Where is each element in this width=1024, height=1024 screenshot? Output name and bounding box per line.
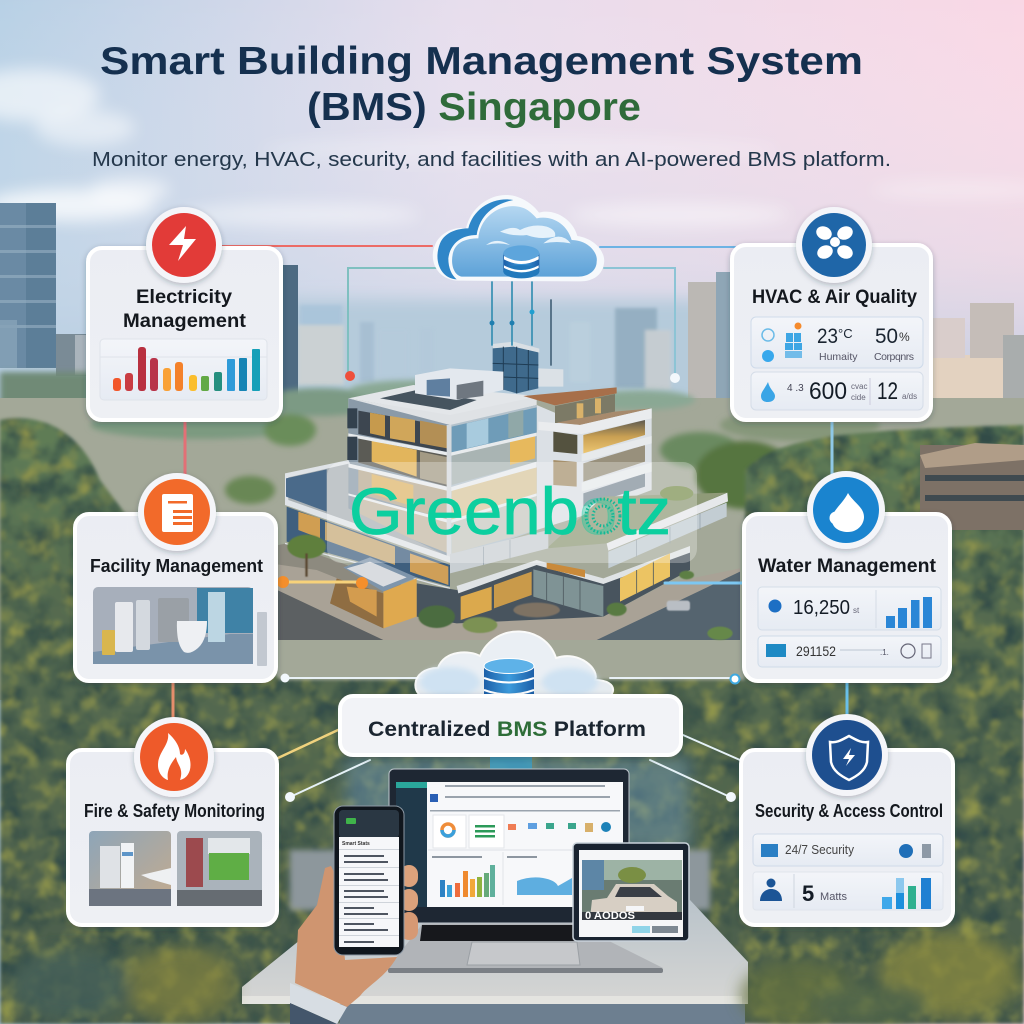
panel: electricity management [88,207,281,420]
desk floor [242,900,748,1004]
subtitle: Monitor energy, HVAC, security, and facilities with an AI-powered BMS platform. [92,149,891,171]
tower roof [348,368,537,426]
heading: Management [123,311,247,332]
readings: alerts: Matts [820,891,847,903]
readings: air quality [751,372,923,410]
distant skyline [0,203,1024,415]
readings: water usage chart [758,587,941,630]
penthouse and plant [493,342,563,393]
phone: Smart Stats [342,841,370,847]
readings: temperature and humidity: % [899,330,910,344]
laptop dashboard [388,769,663,973]
icon: top cloud with database [433,195,604,281]
heading: Electricity [136,287,232,308]
title [100,40,863,129]
brown building right [920,443,1024,530]
icon: flame [134,717,214,797]
heading: HVAC & Air Quality [752,287,917,308]
panel: water management [744,471,950,681]
dashboard widgets [433,815,611,848]
cloud above platform [415,631,613,709]
readings: water usage chart: 16,250 [793,597,850,619]
logo watermark: Greenbotz [327,462,697,563]
dashboard area chart [503,852,572,905]
readings: air quality: 12 [877,378,898,405]
icon: facility clipboard [138,473,216,551]
title: Smart Building Management System [100,40,863,83]
bar chart [100,339,267,400]
hand holding phone [290,806,418,1024]
plaza and roads [270,543,740,640]
central building [270,342,740,640]
title: (BMS) Singapore [307,86,641,129]
icon: database [503,245,539,278]
readings: air quality: 600 [809,378,847,405]
ground floor [417,546,690,623]
icon: shield [806,714,888,796]
fire control image [177,831,262,906]
logo watermark: Greenbotz: Greenbotz [349,474,671,548]
readings: air quality: cide [851,393,866,402]
readings: air quality: a/ds [902,392,917,401]
icon: water drop [807,471,885,549]
tower walls [347,398,537,560]
icon: fan [796,207,872,283]
facility equipment image [93,587,267,666]
readings: air quality: 4 .3 [787,383,804,394]
connector lines [173,246,847,797]
dashboard bar chart [428,850,623,897]
panel: centralized BMS platform [340,696,681,755]
phone [334,806,404,955]
heading: Water Management [758,556,937,577]
readings: security status [753,834,943,866]
sky clouds [0,69,1024,227]
panel: HVAC and air quality [732,207,931,420]
icon: database [484,658,534,709]
tablet with camera view: 0 AODOS [585,910,635,922]
readings: temperature and humidity: 23 [817,325,838,348]
readings: water meter: 291152 [796,643,836,659]
heading: Fire & Safety Monitoring [84,801,265,821]
haze behind devices [345,757,690,852]
panel: facility management [75,473,276,681]
forest [0,416,1024,1024]
heading: Security & Access Control [755,801,943,821]
podium terrace and left wall [285,460,452,588]
podium right [450,486,728,573]
readings: temperature and humidity: Corpqnrs [874,351,914,363]
connector nodes [277,310,740,802]
readings: water meter [758,636,941,667]
readings: alerts [753,872,943,910]
readings: temperature and humidity: 50 [875,325,898,348]
panel: centralized BMS platform: Centralized BMS Platform [368,718,646,741]
heading: Facility Management [90,555,263,576]
readings: temperature and humidity: Humaity [819,351,858,363]
readings: air quality: cvac [851,382,867,391]
readings: water meter: .1. [880,648,889,657]
foreground trees [10,933,1020,1024]
readings: water usage chart: st [853,606,860,615]
tablet with camera view [573,843,689,941]
icon: lightning bolt [146,207,222,283]
entrance annex [330,557,417,628]
readings: temperature and humidity [751,317,923,368]
panel: security and access control [741,714,953,925]
fire equipment image [89,831,171,906]
heading [123,287,247,332]
readings: security status: 24/7 Security [785,842,854,857]
panel: fire and safety monitoring [68,717,277,925]
readings: temperature and humidity: °C [838,326,853,341]
mid ground land [0,372,90,422]
readings: alerts: 5 [802,881,814,906]
trees and cars [287,535,733,640]
wing [523,387,652,530]
